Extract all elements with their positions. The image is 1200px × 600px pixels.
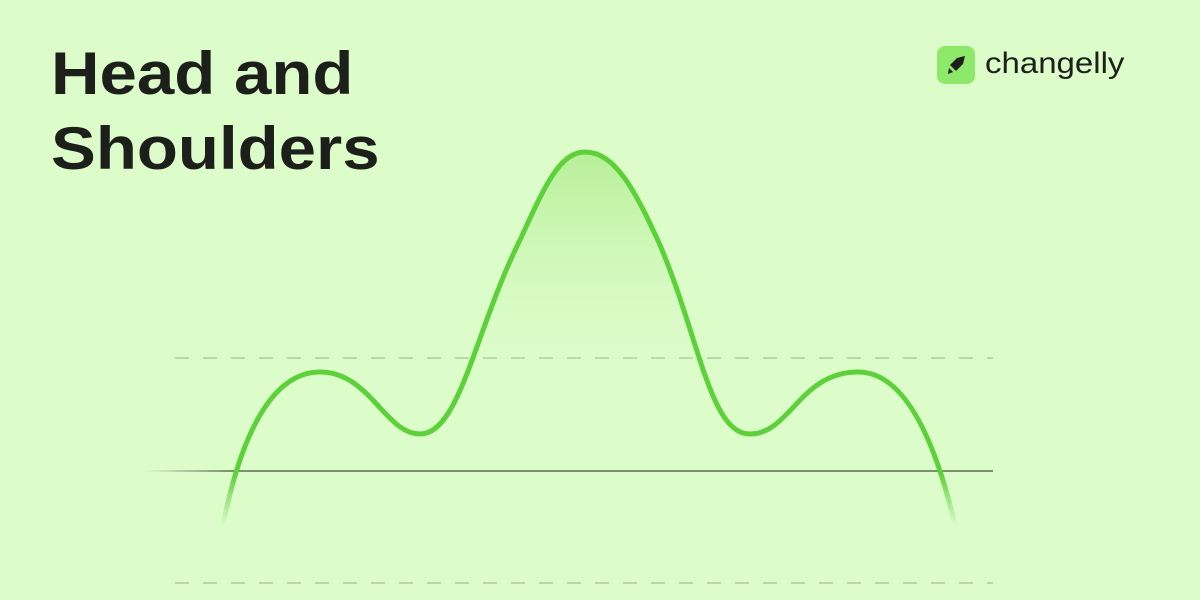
title (51, 40, 380, 182)
logo text: changelly (985, 47, 1124, 80)
logo: changelly (937, 46, 1124, 84)
title: Head and (51, 40, 353, 107)
icon: rocket (937, 46, 975, 84)
title: Shoulders (51, 115, 380, 182)
neckline (145, 470, 993, 472)
head fill (420, 152, 750, 434)
curve (223, 152, 955, 525)
